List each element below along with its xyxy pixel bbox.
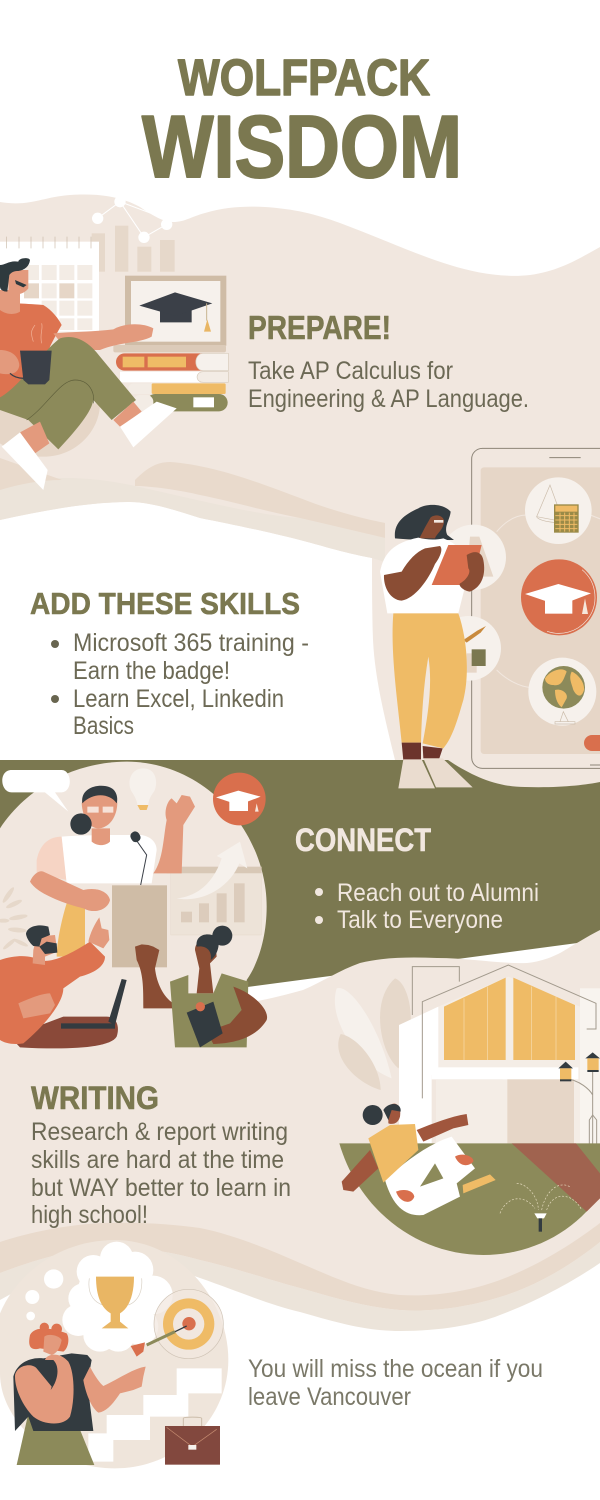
- illustration: woman thinking about goal: [0, 1240, 228, 1468]
- text block: prepare: Take AP Calculus for: [248, 357, 453, 385]
- briefcase: [165, 1417, 220, 1465]
- bullet list: Basics: [73, 712, 134, 740]
- bullet list: [51, 629, 309, 740]
- thought cloud: [25, 1242, 173, 1352]
- text block: connect: [295, 822, 539, 934]
- icon: calculator circle: [525, 477, 592, 544]
- small icon circles: [436, 525, 506, 681]
- background: phone base curve: [445, 758, 600, 787]
- text block: closing note: [248, 1355, 543, 1411]
- book stack: [116, 353, 228, 411]
- bullet list: Learn Excel, Linkedin: [73, 685, 284, 713]
- seat: [0, 403, 100, 457]
- bullet list: [315, 879, 539, 934]
- text block: add these skills: ADD THESE SKILLS: [30, 586, 300, 621]
- illustration: presentation circle with three people: [0, 762, 267, 1053]
- house: [399, 965, 600, 1143]
- icon: graduation cap badge: [213, 773, 266, 825]
- text block: prepare: Engineering & AP Language.: [248, 385, 529, 413]
- background: lower beige wave: [0, 930, 600, 1331]
- circle background: [0, 762, 267, 1053]
- stairs: [88, 1368, 222, 1462]
- woman pointing: [13, 1323, 146, 1465]
- garden path: [512, 1143, 600, 1212]
- icon: target with dart: [131, 1289, 223, 1359]
- speech bubble: [2, 770, 70, 812]
- text block: prepare: [248, 309, 529, 413]
- text block: connect: CONNECT: [295, 822, 431, 858]
- illustration: house, lawn and seated woman: [335, 965, 600, 1255]
- text block: writing: Research & report writing: [31, 1118, 288, 1146]
- text block: writing: but WAY better to learn in: [31, 1174, 291, 1202]
- title: WISDOM: [142, 97, 462, 196]
- woman at podium: [30, 786, 195, 967]
- presentation board and leaves: [0, 842, 262, 951]
- title: WOLFPACK: [178, 49, 430, 106]
- circle background: [0, 1240, 228, 1468]
- text block: closing note: leave Vancouver: [248, 1383, 411, 1411]
- text block: writing: high school!: [31, 1201, 148, 1229]
- text block: closing note: You will miss the ocean if you: [248, 1355, 543, 1383]
- text block: prepare: PREPARE!: [248, 309, 391, 346]
- sprinkler: [500, 1183, 582, 1232]
- bullet list: Microsoft 365 training -: [73, 629, 309, 657]
- icon: globe circle: [528, 658, 596, 726]
- bullet list: Earn the badge!: [73, 657, 230, 685]
- chart bars and network: [92, 196, 175, 272]
- laptop with graduation cap: [113, 276, 226, 352]
- seated woman: [342, 1104, 496, 1215]
- icon: graduation cap circle: [508, 547, 600, 648]
- text block: writing: skills are hard at the time: [31, 1146, 284, 1174]
- calendar: [0, 237, 99, 332]
- phone: [472, 448, 600, 768]
- text block: writing: WRITING: [31, 1080, 159, 1116]
- woman with clipboard: [135, 926, 267, 1047]
- bullet list: Talk to Everyone: [337, 906, 503, 934]
- man with laptop: [0, 917, 127, 1048]
- background: upper beige wave: [0, 194, 600, 780]
- man in orange shirt: [0, 258, 177, 490]
- text block: add these skills: [30, 586, 309, 740]
- lamp posts: [558, 1052, 600, 1168]
- title: [142, 49, 462, 196]
- background: olive section: [0, 760, 600, 1020]
- lawn: [339, 1143, 600, 1255]
- illustration: phone screen and standing woman: [380, 448, 600, 788]
- bullet list: Reach out to Alumni: [337, 879, 539, 907]
- woman standing with tablet: [380, 505, 484, 788]
- icon: light bulb: [129, 768, 156, 810]
- illustration: student with laptop and books: [0, 196, 228, 490]
- text block: writing: [31, 1080, 291, 1229]
- leaves: [335, 978, 411, 1090]
- icon: trophy: [89, 1277, 142, 1328]
